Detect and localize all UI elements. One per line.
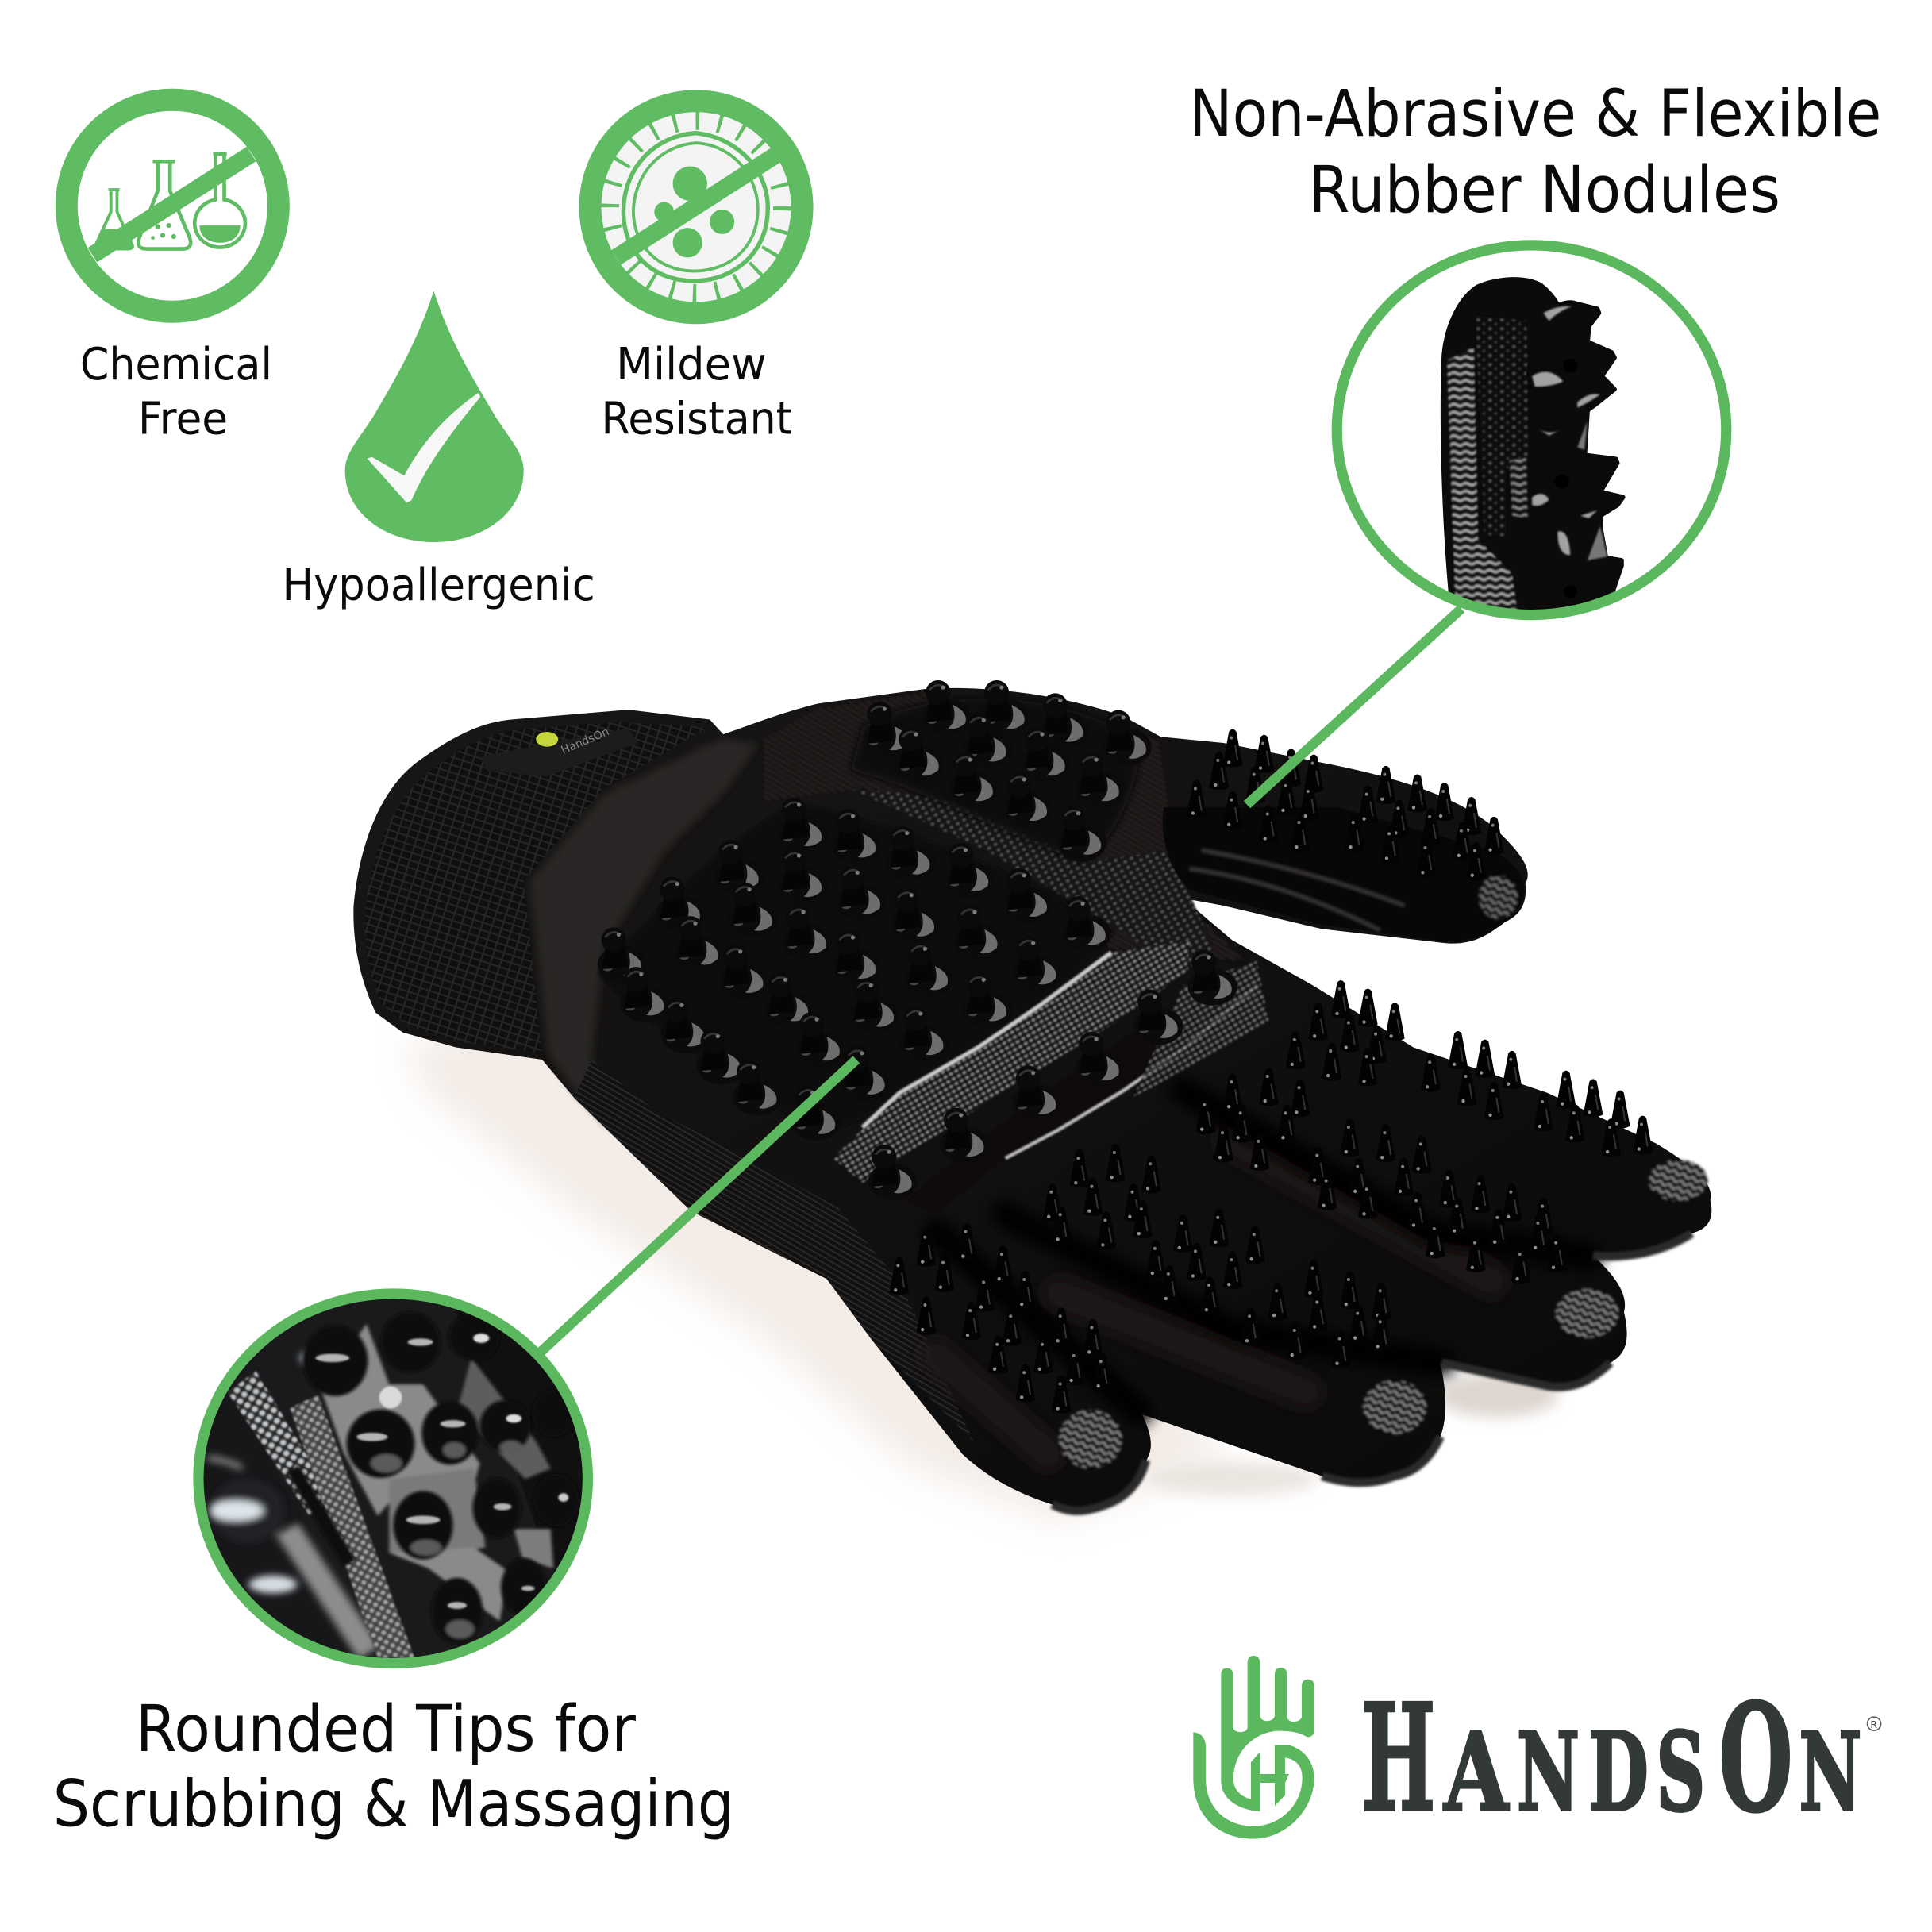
fingertip rim xyxy=(1053,1233,1691,1511)
zipper band lower xyxy=(290,1395,414,1658)
nodule cups xyxy=(300,1311,547,1645)
connector line: nodules callout xyxy=(1247,609,1461,805)
bright edge line xyxy=(863,953,1111,1127)
blurred highlight two xyxy=(248,1576,297,1593)
glove silhouette xyxy=(353,688,1711,1511)
cups lower reflections xyxy=(371,1441,522,1638)
right edge sheen xyxy=(1577,421,1607,560)
ribbed highlight strip xyxy=(1447,347,1518,616)
shadow under ring finger xyxy=(1435,1372,1559,1417)
upper pad nodules xyxy=(864,680,1152,861)
palm pad xyxy=(598,803,1115,1129)
blurred texture left xyxy=(208,1348,369,1653)
logo: wordmark: N xyxy=(1799,1709,1862,1836)
icon: chemical free xyxy=(67,100,279,312)
dark left zone xyxy=(174,1279,400,1690)
icon: check mark xyxy=(368,393,480,502)
dark seam xyxy=(293,1468,349,1564)
icon: mildew resistant xyxy=(591,101,802,313)
label: mildew resistant: Mildew xyxy=(616,339,767,391)
logo: wordmark: H xyxy=(1361,1671,1435,1845)
fingertip sparkle: middle xyxy=(1555,1289,1619,1338)
thumb finger xyxy=(1163,807,1524,941)
finger gaps xyxy=(937,1091,1589,1412)
icon: microbe inner membrane xyxy=(633,143,758,271)
dotted mid texture xyxy=(1476,316,1530,537)
lower bright line xyxy=(1006,986,1257,1158)
finger shading xyxy=(937,1091,1589,1454)
icon: microbe membrane xyxy=(623,133,768,281)
dark right zone xyxy=(454,1309,583,1572)
heading: non-abrasive nodules xyxy=(1189,77,1881,228)
label: chemical free: Chemical xyxy=(80,339,272,391)
nodule pits xyxy=(1554,359,1578,598)
connector line: rounded tips callout xyxy=(540,1060,856,1353)
cuff mesh xyxy=(364,722,709,1053)
cuff label tag xyxy=(480,728,638,776)
icon: bubbles xyxy=(151,223,176,240)
palm nodules xyxy=(598,798,1111,1141)
icon: small flask liquid xyxy=(96,229,132,248)
icon: conical flask xyxy=(138,161,191,249)
heading: non-abrasive nodules: Non-Abrasive & Flexible xyxy=(1189,77,1881,152)
pinky spikes xyxy=(889,1223,1112,1414)
icon: round flask xyxy=(194,154,245,248)
blurred dark lobes xyxy=(210,1479,284,1542)
icon: hypoallergenic drop xyxy=(345,291,524,542)
heading: rounded tips: Rounded Tips for xyxy=(136,1692,637,1767)
palm dotted texture xyxy=(850,788,1214,973)
label: mildew resistant: Resistant xyxy=(602,393,792,445)
label: chemical free xyxy=(80,339,272,445)
blurred highlight one xyxy=(210,1501,263,1521)
blurred band xyxy=(287,1529,369,1653)
logo: wordmark: A xyxy=(1443,1709,1510,1836)
thumb spikes xyxy=(1187,729,1504,880)
hand with fingers and palm xyxy=(1221,1656,1314,1811)
logo: wordmark xyxy=(1361,1671,1881,1845)
textured band: palm edge xyxy=(833,941,1191,1183)
tag logo xyxy=(536,732,558,747)
inset macro photo xyxy=(205,1309,583,1658)
label: mildew resistant xyxy=(602,339,792,445)
ring finger spikes xyxy=(1042,1144,1391,1368)
nodule lobes xyxy=(1526,364,1529,493)
registered mark: R xyxy=(1870,1718,1877,1730)
inset finger photo xyxy=(1443,279,1622,621)
knit side xyxy=(574,1060,973,1441)
logo: wordmark: O xyxy=(1718,1671,1793,1845)
fingertip sparkle: pinky xyxy=(1058,1410,1122,1468)
shadow under pinky xyxy=(1146,1461,1318,1495)
fingertip sparkle: index xyxy=(1649,1160,1707,1201)
icon: slash xyxy=(92,154,252,255)
inset: rounded tips close-up xyxy=(193,1288,594,1668)
cup highlights xyxy=(315,1334,568,1609)
thumb ridges xyxy=(1189,850,1405,930)
icon: round flask liquid xyxy=(199,225,241,243)
nodules and spikes xyxy=(598,680,1653,1414)
blurred lobe rim xyxy=(208,1458,242,1468)
inset ring xyxy=(1337,245,1726,615)
glove photo xyxy=(353,680,1711,1511)
knuckle pad xyxy=(906,982,1238,1214)
light webbing xyxy=(321,1324,553,1622)
heading: rounded tips: Scrubbing & Massaging xyxy=(53,1768,734,1842)
hand loop and monogram xyxy=(1193,1732,1314,1839)
inset ring xyxy=(198,1294,587,1664)
zipper band upper xyxy=(228,1371,333,1516)
inset: rubber nodule close-up xyxy=(1337,245,1726,621)
icon: small flask xyxy=(96,190,133,249)
fingertip sparkle: thumb xyxy=(1479,875,1518,919)
icon: slash xyxy=(616,154,777,257)
logo: wordmark: D xyxy=(1588,1709,1649,1836)
icon: microbe spores xyxy=(654,167,734,257)
heading: non-abrasive nodules: Rubber Nodules xyxy=(1309,153,1780,228)
knit wrist xyxy=(529,739,758,1127)
label: chemical free: Free xyxy=(138,393,228,445)
upper pad xyxy=(850,699,1140,863)
logo: wordmark: N xyxy=(1517,1709,1580,1836)
palm knit xyxy=(764,692,1245,961)
tag wordmark: HandsOn xyxy=(560,725,611,757)
lower textured strip xyxy=(1133,961,1269,1097)
finger body brown sheen xyxy=(937,1140,1491,1454)
logo: wordmark: S xyxy=(1656,1709,1705,1836)
fingertip sparkle: ring xyxy=(1363,1380,1427,1434)
logo: hand mark xyxy=(1193,1656,1314,1839)
blurred highlight three xyxy=(300,1348,354,1368)
registered mark xyxy=(1868,1717,1881,1730)
knuckle nodules xyxy=(868,950,1237,1200)
nodule highlights xyxy=(1532,306,1600,555)
icon: microbe rays xyxy=(610,121,783,293)
cups dark xyxy=(302,1312,579,1644)
finger body xyxy=(1443,279,1622,621)
mid ridged strip xyxy=(1510,458,1528,518)
middle finger spikes xyxy=(1195,1068,1567,1284)
index finger spikes xyxy=(1286,980,1653,1157)
label: hypoallergenic: Hypoallergenic xyxy=(282,560,595,611)
glove shadow xyxy=(406,1010,1559,1522)
heading: rounded tips xyxy=(53,1692,734,1842)
